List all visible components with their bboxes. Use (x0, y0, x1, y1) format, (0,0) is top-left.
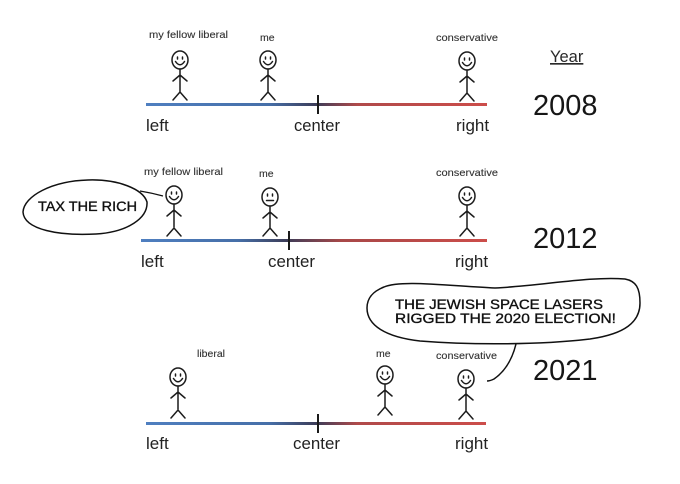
label: my fellow liberal: my fellow liberal (144, 166, 223, 178)
panel: 2008 row (146, 29, 598, 135)
label: right: right (455, 252, 488, 271)
center tick (288, 231, 290, 250)
label: me: me (376, 348, 391, 360)
label: right: right (455, 434, 488, 453)
label: left: left (141, 252, 164, 271)
label: conservative: conservative (436, 167, 498, 179)
label: right: right (456, 116, 489, 135)
heading: Year: Year (550, 48, 584, 66)
panel: 2012 row (23, 166, 598, 271)
label: center: center (268, 252, 315, 271)
label: center: center (293, 434, 340, 453)
label: center: center (294, 116, 340, 135)
stick figure: conservative (459, 187, 475, 236)
stick figure: me (260, 51, 276, 100)
speech bubble: jewish space lasers (367, 278, 640, 381)
speech bubble: jewish space lasers: RIGGED THE 2020 ELECTION! (395, 310, 616, 326)
label: conservative: conservative (436, 32, 498, 44)
label: me: me (259, 168, 274, 180)
speech bubble: tax the rich: TAX THE RICH (38, 198, 137, 214)
axis line (146, 422, 486, 425)
label: left: left (146, 116, 169, 135)
stick figure: me, neutral face (262, 188, 278, 236)
center tick (317, 414, 319, 433)
year: 2021: 2021 (533, 355, 598, 387)
year: 2012: 2012 (533, 223, 598, 255)
stick figure: conservative (458, 370, 474, 419)
center tick (317, 95, 319, 114)
label: left: left (146, 434, 169, 453)
label: me: me (260, 32, 275, 44)
panel: 2021 row (146, 278, 640, 453)
stick figure: conservative (459, 52, 475, 101)
speech bubble: jewish space lasers: THE JEWISH SPACE LASERS (395, 296, 603, 312)
stick figure: liberal (170, 368, 186, 418)
stick figure: my fellow liberal (166, 186, 182, 236)
stick figure: me (377, 366, 393, 415)
axis line (146, 103, 487, 106)
speech bubble: tax the rich (23, 180, 163, 234)
label: conservative: conservative (436, 350, 497, 362)
stick figure: my fellow liberal (172, 51, 188, 100)
label: my fellow liberal: my fellow liberal (149, 29, 228, 41)
axis line (141, 239, 487, 242)
label: liberal: liberal (197, 348, 225, 360)
year: 2008: 2008 (533, 90, 598, 122)
